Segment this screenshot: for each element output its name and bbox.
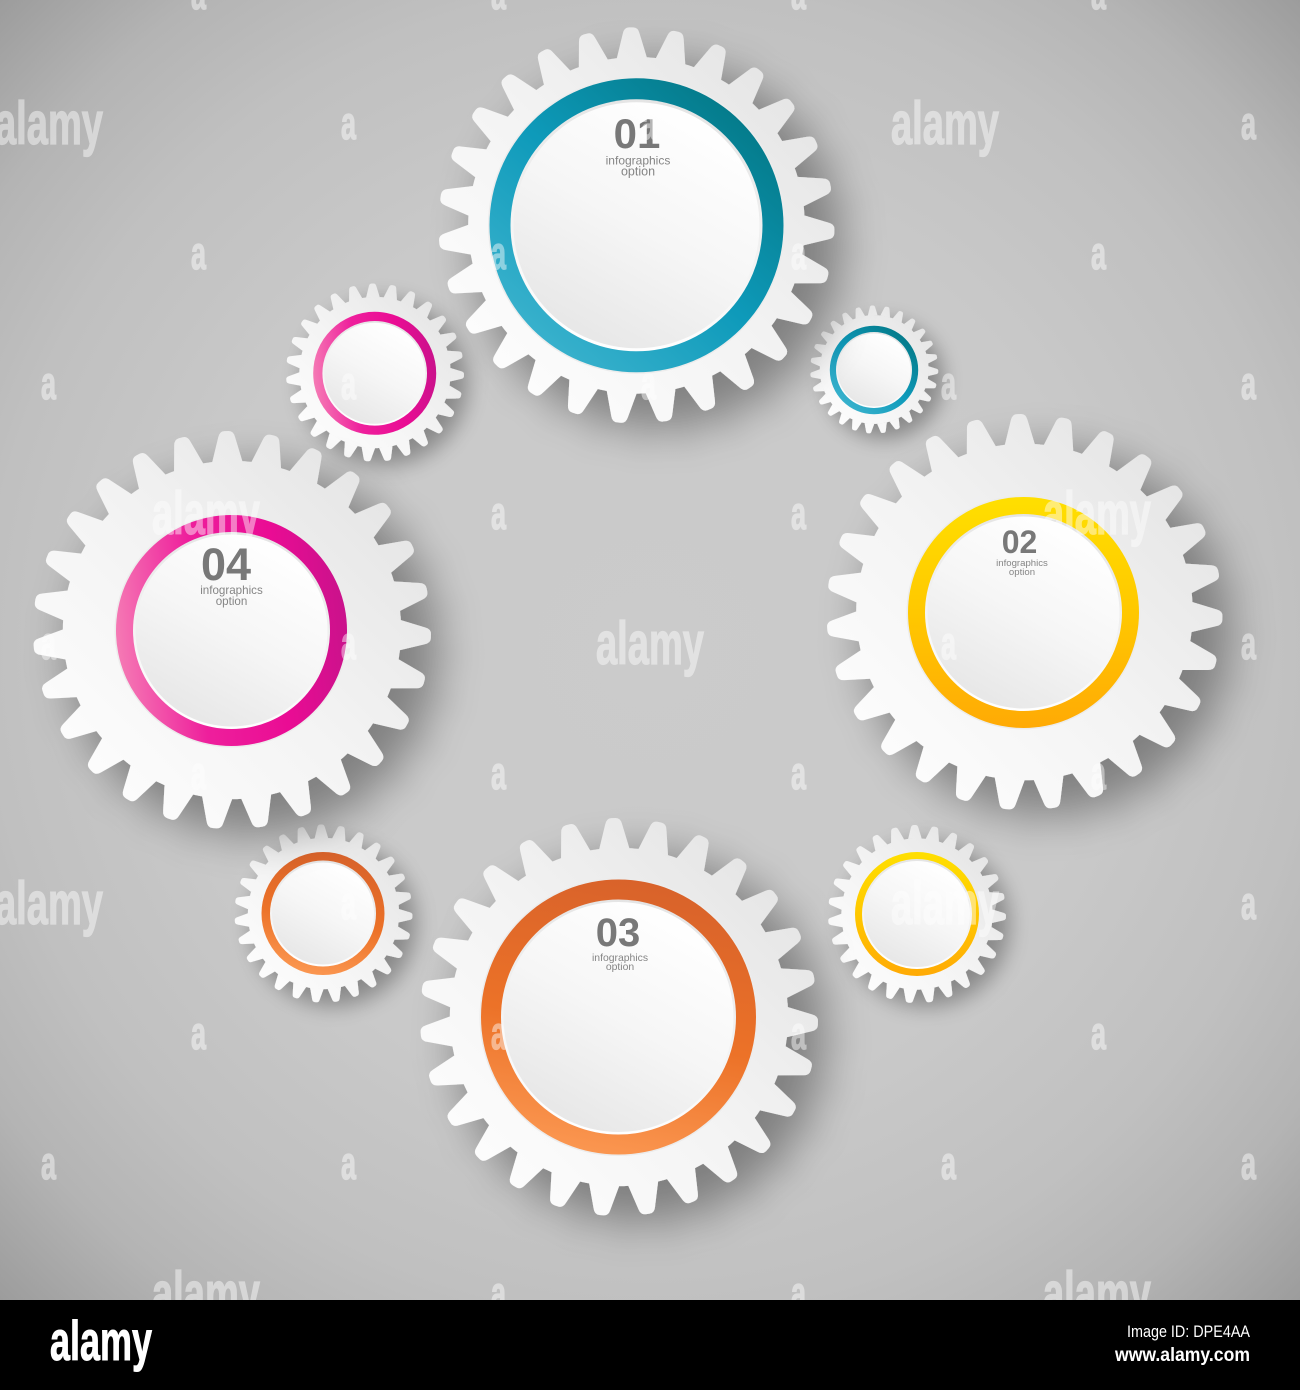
watermark: small letters: a	[41, 1137, 56, 1189]
caption 04	[200, 584, 263, 608]
watermark: alamy words: alamy	[1043, 480, 1151, 547]
watermark: small letters: a	[341, 1137, 356, 1189]
caption 01: infographics	[606, 154, 670, 168]
footer logo: alamy	[50, 1309, 152, 1372]
large gear 04: pink	[23, 421, 441, 839]
watermark: small letters: a	[491, 227, 506, 279]
watermark: small letters: a	[1241, 617, 1256, 669]
watermark: small letters: a	[491, 747, 506, 799]
watermark: alamy words: alamy	[891, 870, 999, 937]
caption 03	[592, 953, 648, 973]
caption 02: infographics	[996, 558, 1048, 569]
watermark: small letters: a	[791, 747, 806, 799]
watermark: small letters: a	[791, 227, 806, 279]
watermark: small letters: a	[491, 1007, 506, 1059]
number 03: 03	[596, 911, 640, 955]
watermark: small letters: a	[941, 357, 956, 409]
caption 04: infographics	[200, 584, 263, 597]
number 04: 04	[201, 539, 251, 590]
watermark: alamy words	[0, 90, 1151, 1327]
watermark: small letters: a	[341, 97, 356, 149]
large gear 03: orange	[410, 808, 828, 1226]
watermark: small letters: a	[1091, 747, 1106, 799]
watermark: small letters: a	[791, 1007, 806, 1059]
caption 01: option	[621, 164, 655, 178]
number 01: 01	[614, 110, 660, 157]
watermark: small letters: a	[941, 1137, 956, 1189]
watermark: small letters: a	[1241, 357, 1256, 409]
ring and disc 02	[908, 497, 1139, 728]
caption 03: option	[606, 962, 634, 973]
ring and disc 04	[116, 515, 347, 746]
footer bar	[0, 1300, 1300, 1390]
watermark: small letters: a	[641, 97, 656, 149]
watermark: alamy words: alamy	[1043, 1260, 1151, 1327]
watermark: small letters: a	[1241, 1137, 1256, 1189]
watermark: small letters: a	[641, 357, 656, 409]
small gear: orange	[230, 820, 417, 1007]
caption 01	[606, 154, 670, 178]
watermark: small letters: a	[491, 1267, 506, 1319]
small gear: pink	[282, 279, 468, 466]
watermark: alamy words: alamy	[152, 1260, 260, 1327]
watermark: alamy words: alamy	[152, 480, 260, 547]
small gear: yellow	[824, 821, 1010, 1007]
small gear: teal	[807, 302, 941, 437]
large gear 01: teal	[429, 17, 844, 433]
watermark: small letters: a	[191, 1007, 206, 1059]
caption 03: infographics	[592, 953, 648, 964]
watermark: small letters: a	[491, 487, 506, 539]
watermark: small letters: a	[191, 747, 206, 799]
watermark: small letters: a	[341, 357, 356, 409]
website: www.alamy.com	[1114, 1345, 1250, 1366]
watermark: small letters: a	[41, 617, 56, 669]
ring and disc 03	[481, 880, 756, 1154]
watermark: alamy words: alamy	[0, 870, 103, 937]
number 02: 02	[1002, 524, 1037, 560]
watermark: small letters: a	[191, 227, 206, 279]
watermark: alamy words: alamy	[596, 610, 704, 677]
ring and disc 01	[490, 78, 784, 372]
watermark: small letters: a	[341, 877, 356, 929]
watermark: small letters: a	[1241, 877, 1256, 929]
caption 02	[996, 558, 1048, 578]
watermark: small letters: a	[941, 617, 956, 669]
caption 04: option	[216, 595, 247, 608]
watermark: small letters: a	[1241, 97, 1256, 149]
watermark: small letters: a	[41, 357, 56, 409]
image id: Image ID: DPE4AA	[1127, 1322, 1251, 1341]
watermark: small letters: a	[791, 1267, 806, 1319]
watermark: small letters: a	[1091, 227, 1106, 279]
watermark: small letters: a	[1091, 1007, 1106, 1059]
caption 02: option	[1009, 567, 1035, 578]
watermark: small letters: a	[341, 617, 356, 669]
watermark: alamy words: alamy	[0, 90, 103, 157]
large gear 02: yellow	[817, 404, 1232, 820]
watermark: alamy words: alamy	[891, 90, 999, 157]
watermark: small letters: a	[791, 487, 806, 539]
